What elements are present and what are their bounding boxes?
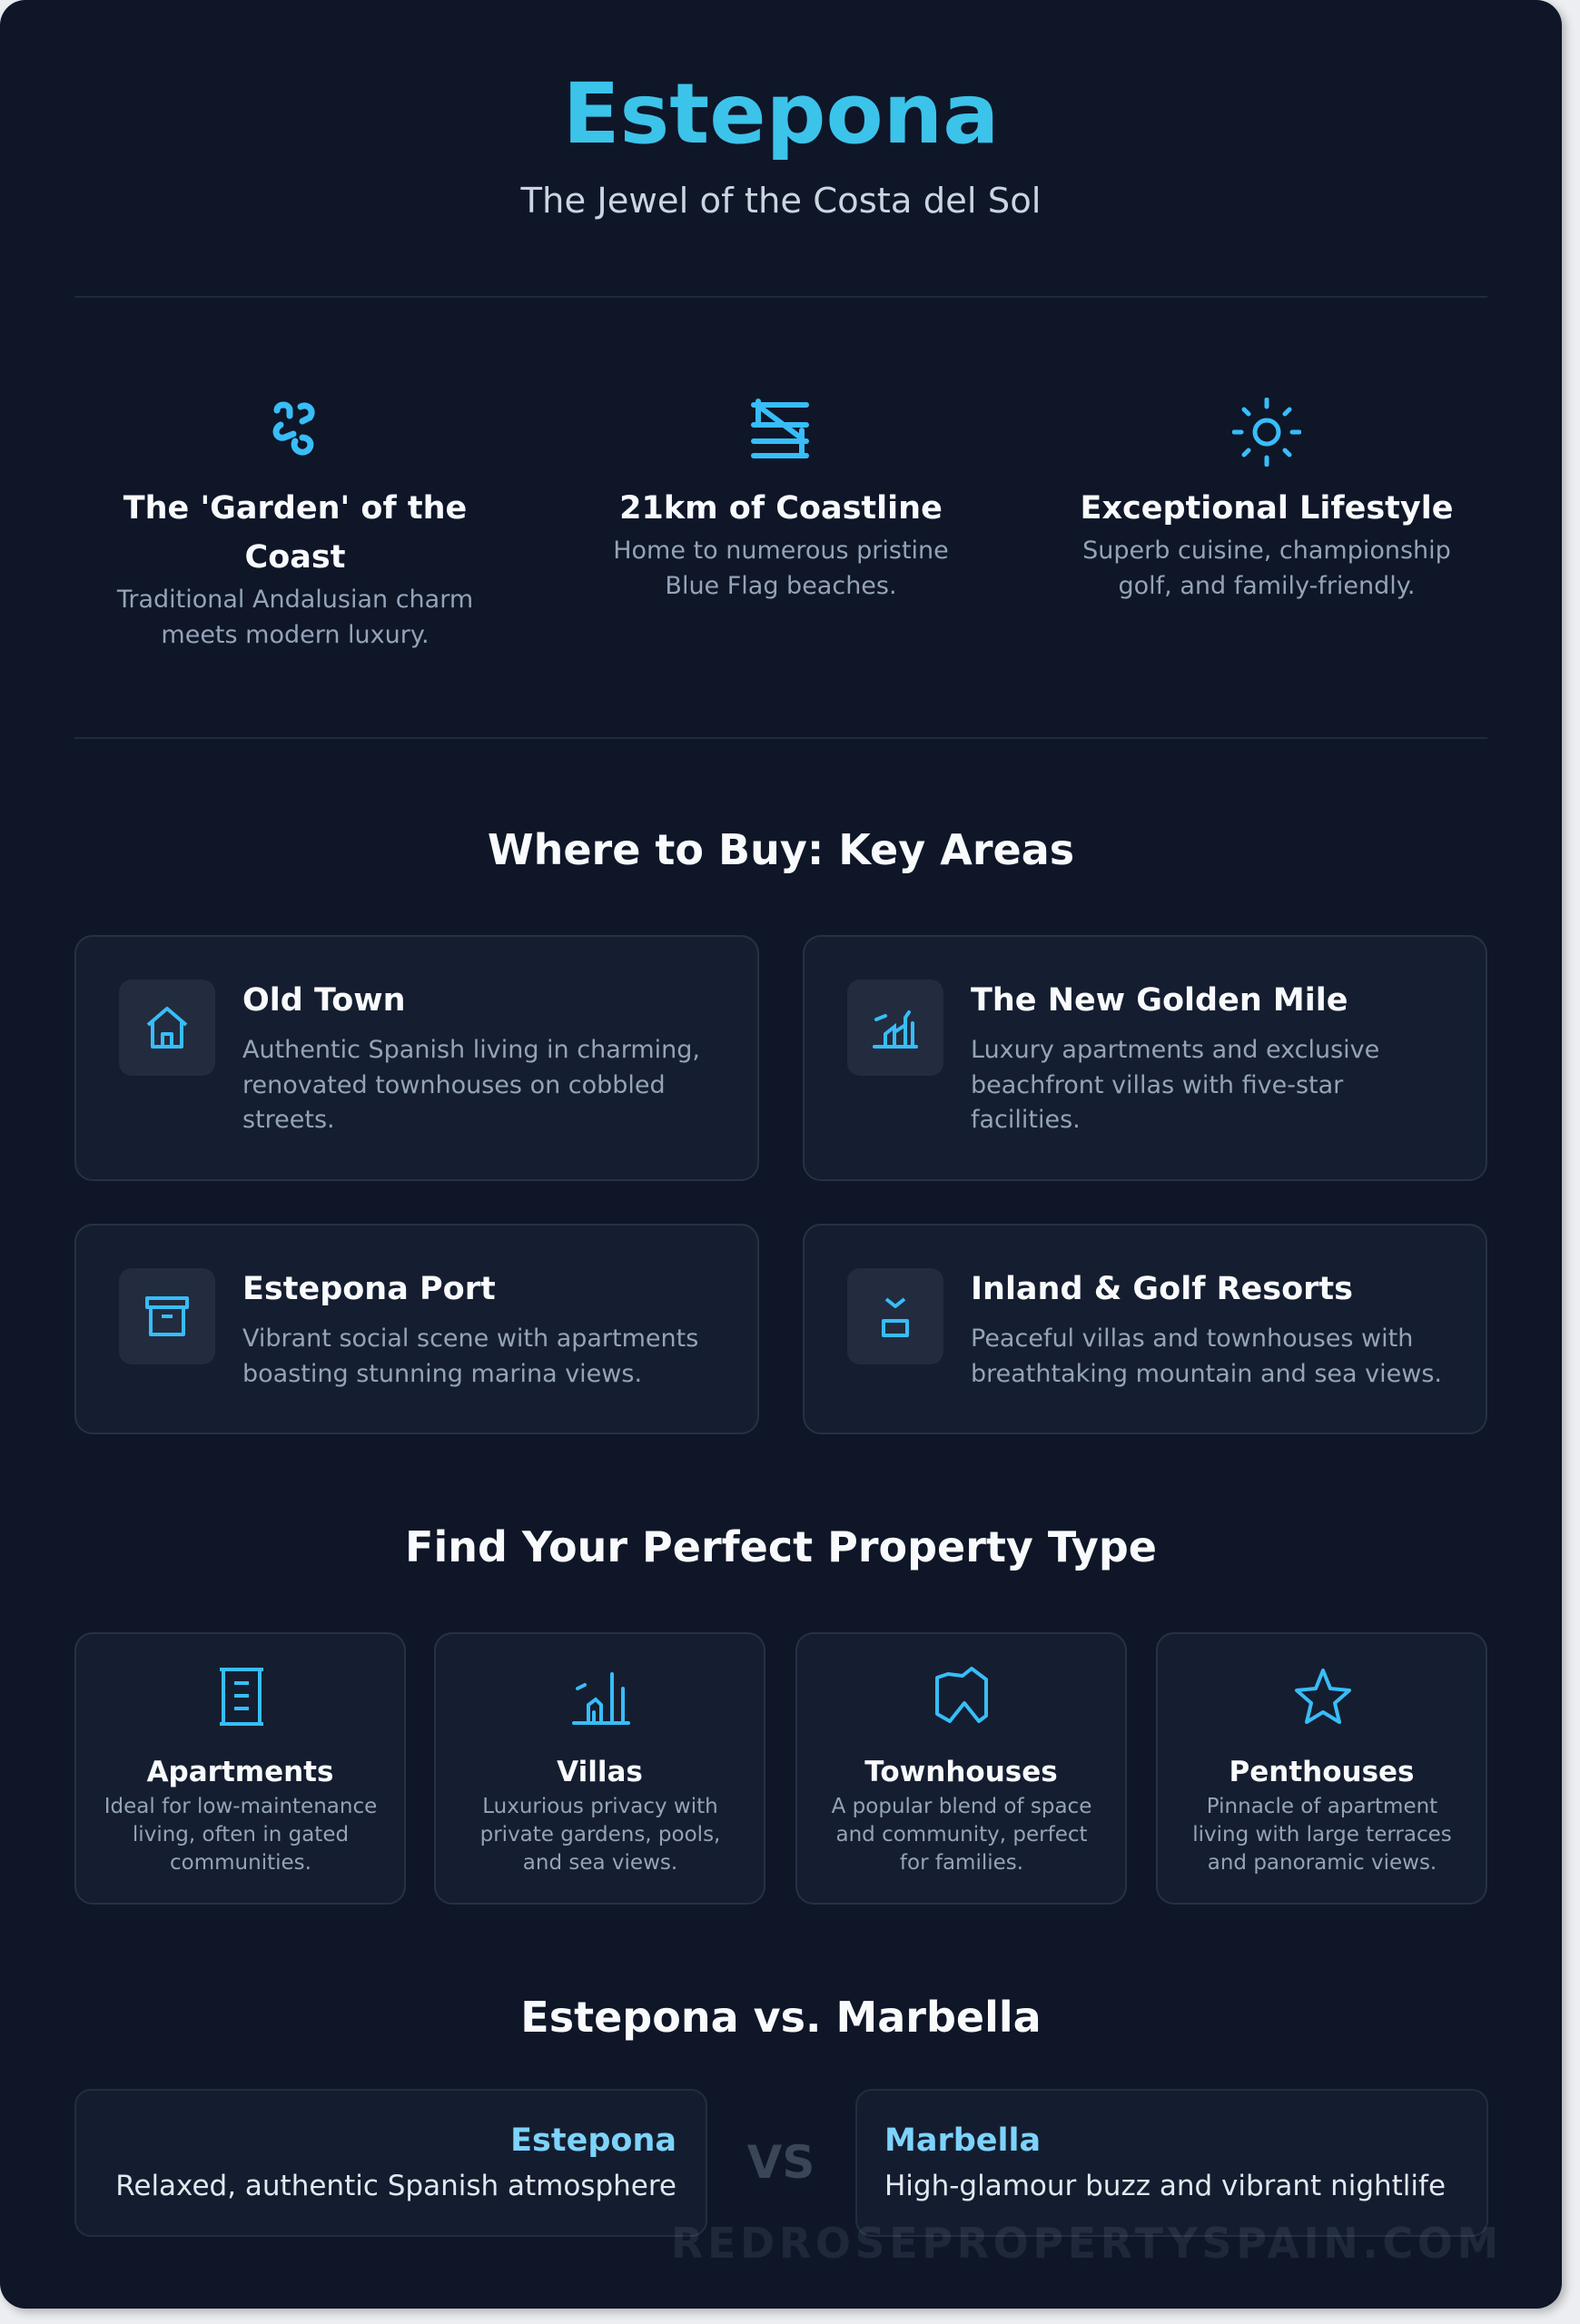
icon: villa <box>572 1672 630 1725</box>
card: apartments: Apartments <box>147 1756 333 1788</box>
card: penthouses <box>1156 1632 1487 1905</box>
feature: garden: Traditional Andalusian charm meets modern luxury. <box>117 586 473 649</box>
title: Estepona <box>563 65 999 162</box>
feature: garden <box>116 401 473 649</box>
icon: coastline <box>751 399 809 458</box>
card: port: Estepona Port <box>242 1271 496 1307</box>
card: port: Vibrant social scene with apartments boasting stunning marina views. <box>242 1324 698 1387</box>
card: old town <box>74 935 759 1181</box>
icon: sun <box>1232 398 1301 467</box>
card: marbella <box>855 2089 1488 2237</box>
icon: townhouse <box>935 1667 988 1723</box>
feature: coastline: Home to numerous pristine Blue Flag beaches. <box>613 537 949 600</box>
feature: lifestyle <box>1081 398 1453 600</box>
feature: lifestyle: Superb cuisine, championship golf, and family-friendly. <box>1082 537 1451 600</box>
card: golden mile <box>803 935 1487 1181</box>
feature: lifestyle: Exceptional Lifestyle <box>1081 490 1453 527</box>
icon: house <box>119 980 215 1076</box>
card: villas: Luxurious privacy with private gardens, pools, and sea views. <box>480 1795 720 1875</box>
feature: garden: The 'Garden' of the Coast <box>123 490 467 576</box>
card: estepona <box>74 2089 707 2237</box>
icon: box <box>119 1268 215 1364</box>
card: townhouses: A popular blend of space and community, perfect for families. <box>832 1795 1091 1875</box>
card: old town: Old Town <box>242 982 406 1019</box>
feature: coastline <box>613 399 949 600</box>
card: apartments: Ideal for low-maintenance living, often in gated communities. <box>104 1795 377 1875</box>
card: estepona: Estepona <box>510 2122 676 2159</box>
card: golden mile: The New Golden Mile <box>971 982 1348 1019</box>
icon: golf <box>847 1268 943 1364</box>
icon: apartment <box>220 1668 263 1726</box>
card: golf <box>803 1224 1487 1434</box>
card: townhouses: Townhouses <box>864 1756 1058 1788</box>
heading: property type: Find Your Perfect Property Type <box>405 1522 1157 1571</box>
card: villas: Villas <box>557 1756 643 1788</box>
card: golf: Peaceful villas and townhouses with breathtaking mountain and sea views. <box>971 1324 1442 1387</box>
subtitle: The Jewel of the Costa del Sol <box>521 181 1041 222</box>
card: apartments <box>74 1632 406 1905</box>
card: villas <box>434 1632 765 1905</box>
card: penthouses: Pinnacle of apartment living with large terraces and panoramic views. <box>1192 1795 1452 1875</box>
card: port <box>74 1224 759 1434</box>
icon: garden <box>272 401 315 456</box>
card: estepona: Relaxed, authentic Spanish atmosphere <box>115 2170 676 2202</box>
heading: key areas: Where to Buy: Key Areas <box>488 825 1074 874</box>
card: marbella: Marbella <box>884 2122 1041 2159</box>
heading: vs: Estepona vs. Marbella <box>520 1993 1042 2042</box>
vs label: VS <box>747 2136 815 2189</box>
icon: buildings <box>847 980 943 1076</box>
card: golf: Inland & Golf Resorts <box>971 1271 1353 1307</box>
card: marbella: High-glamour buzz and vibrant nightlife <box>884 2170 1446 2202</box>
icon: star <box>1295 1669 1351 1725</box>
feature: coastline: 21km of Coastline <box>619 490 943 527</box>
card: old town: Authentic Spanish living in charming, renovated townhouses on cobbled streets. <box>242 1036 700 1134</box>
card: townhouses <box>795 1632 1127 1905</box>
card: golden mile: Luxury apartments and exclusive beachfront villas with five-star facilities. <box>971 1036 1379 1134</box>
card: penthouses: Penthouses <box>1229 1756 1415 1788</box>
watermark: REDROSEPROPERTYSPAIN.COM <box>671 2219 1503 2268</box>
